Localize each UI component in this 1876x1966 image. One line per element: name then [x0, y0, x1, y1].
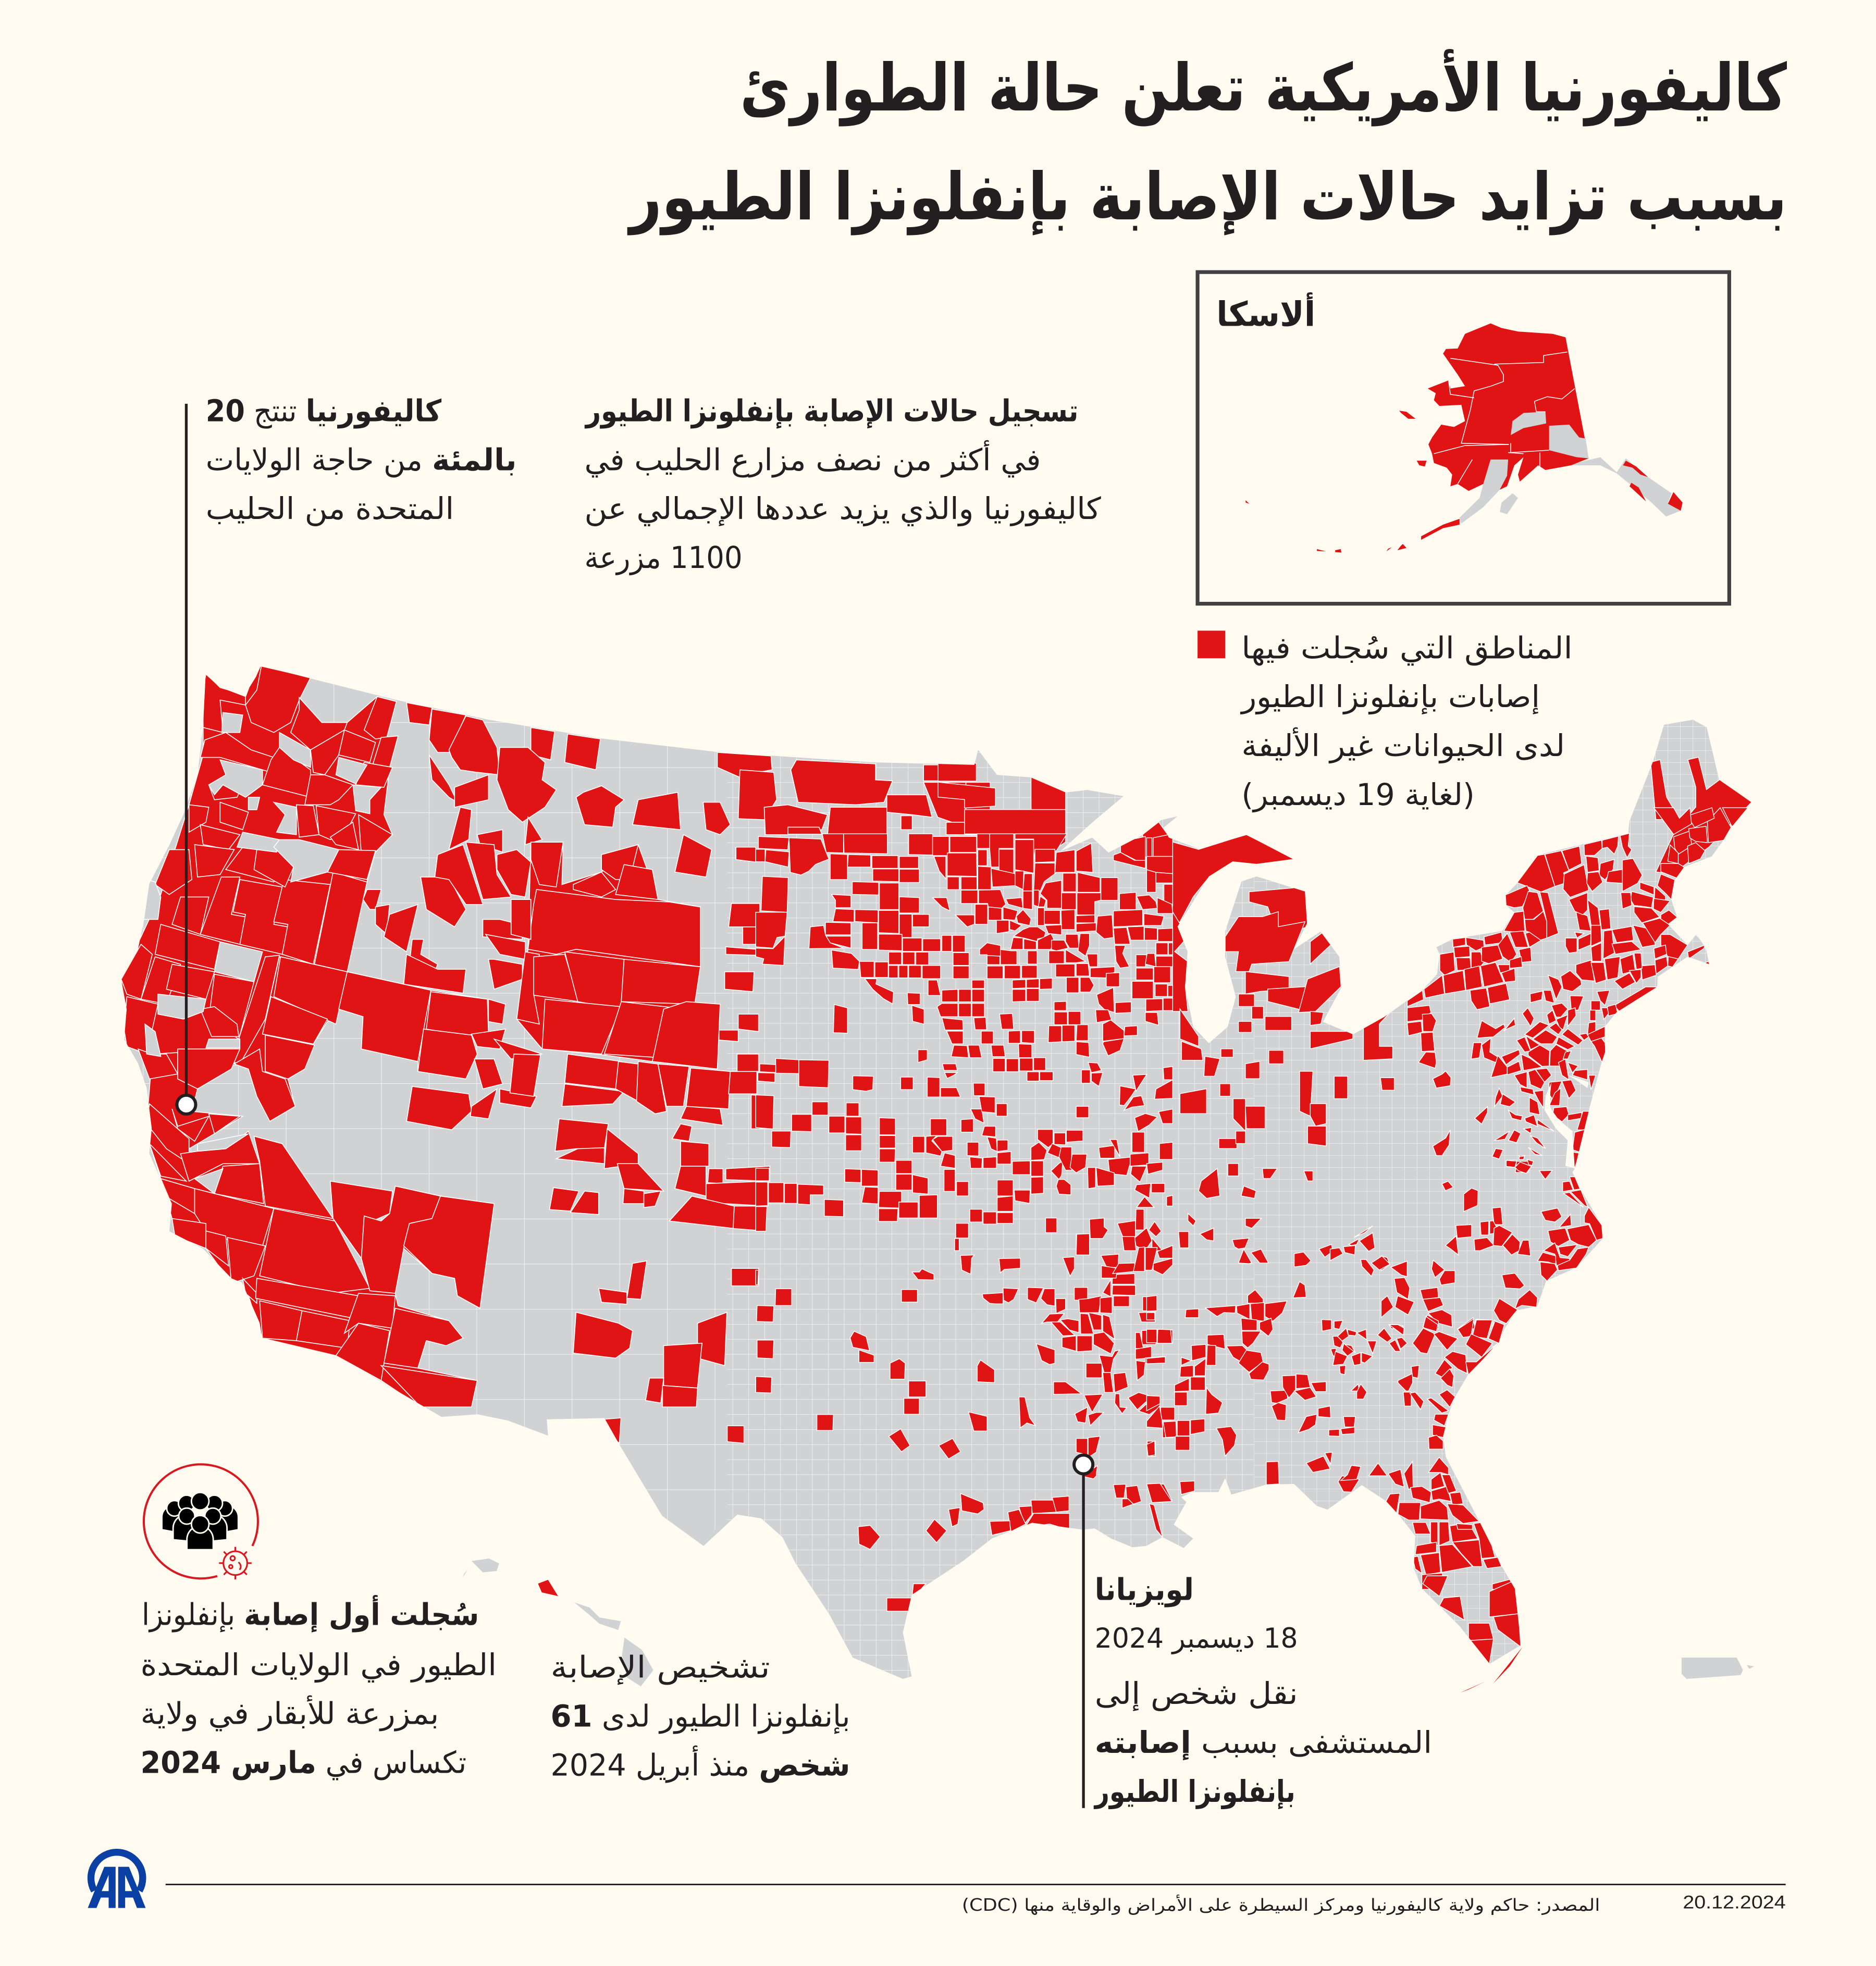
legend text [1240, 630, 1573, 813]
text block: first case: بمزرعة للأبقار في ولاية [141, 1696, 439, 1732]
southern Texas, west Texas and south Florida red counties [602, 1418, 1521, 1664]
grey gaps in western counties [144, 712, 381, 1194]
text block: California milk share: المتحدة من الحليب [206, 491, 454, 526]
text block: 61 cases: بإنفلونزا الطيور لدى 61 [550, 1698, 850, 1734]
text block: dairy farms: تسجيل حالات الإصابة بإنفلونزا الطيور [584, 393, 1079, 429]
icon: people with virus [144, 1464, 258, 1579]
text block: first case: سُجلت أول إصابة بإنفلونزا [142, 1595, 479, 1633]
text block: first case [141, 1594, 497, 1780]
text block: Louisiana: لويزيانا [1095, 1572, 1194, 1608]
label: Alaska: ألاسكا [1216, 292, 1315, 335]
panel: Alaska inset [1198, 272, 1729, 604]
north-central red counties [938, 757, 1751, 1228]
text block: first case: الطيور في الولايات المتحدة [141, 1647, 497, 1683]
text block: California milk share [206, 393, 517, 526]
leader line: California [177, 404, 196, 1114]
leader line: Louisiana [1074, 1455, 1093, 1808]
map: Hawaii [463, 1559, 653, 1686]
southeast red counties [1146, 1226, 1515, 1589]
text block: Louisiana: نقل شخص إلى [1095, 1676, 1298, 1712]
title [627, 49, 1787, 236]
legend text: المناطق التي سُجلت فيها [1241, 630, 1573, 665]
text block: California milk share: كاليفورنيا تنتج 20 [206, 393, 442, 429]
text block: 61 cases: تشخيص الإصابة [550, 1650, 770, 1686]
legend text: (لغاية 19 ديسمبر) [1241, 777, 1475, 813]
map: Puerto Rico [1682, 1658, 1754, 1679]
western red counties [121, 666, 990, 1407]
text block: first case: تكساس في مارس 2024 [141, 1745, 466, 1780]
source line: المصدر: حاكم ولاية كاليفورنيا ومركز السيطرة على الأمراض والوقاية منها (CDC) [962, 1894, 1600, 1915]
text block: dairy farms [584, 393, 1101, 576]
Virginia and North Carolina red counties [1381, 1156, 1602, 1329]
text block: Louisiana [1093, 1572, 1432, 1810]
south-central red counties [756, 1234, 1172, 1549]
text block: Louisiana: المستشفى بسبب إصابته [1095, 1725, 1432, 1761]
text block: Louisiana: بإنفلونزا الطيور [1093, 1774, 1295, 1810]
footer rule [166, 1884, 1786, 1885]
text block: dairy farms: 1100 مزرعة [584, 540, 743, 576]
map: Alaska counties [1245, 324, 1683, 553]
midwest red counties [756, 834, 1172, 1251]
legend text: لدى الحيوانات غير الأليفة [1241, 727, 1565, 764]
text block: dairy farms: كاليفورنيا والذي يزيد عددها الإجمالي عن [584, 491, 1101, 527]
northeast red counties [1407, 808, 1750, 1172]
text block: 61 cases: شخص منذ أبريل 2024 [550, 1745, 850, 1783]
date: 20.12.2024 [1683, 1892, 1786, 1912]
Chesapeake and Delaware bays [1545, 1075, 1589, 1168]
text block: California milk share: بالمئة من حاجة الولايات [206, 442, 517, 478]
legend text: إصابات بإنفلونزا الطيور [1240, 679, 1540, 715]
legend swatch [1198, 630, 1225, 658]
text block: 61 cases [550, 1650, 850, 1783]
legend [1198, 630, 1573, 813]
map: contiguous United States counties [101, 652, 1768, 1693]
text block: Louisiana: 18 ديسمبر 2024 [1095, 1623, 1298, 1654]
logo: Anadolu Agency [88, 1852, 145, 1908]
Florida Keys [1460, 1647, 1523, 1693]
icon: virus [219, 1547, 252, 1579]
text block: dairy farms: في أكثر من نصف مزارع الحليب في [584, 440, 1041, 478]
